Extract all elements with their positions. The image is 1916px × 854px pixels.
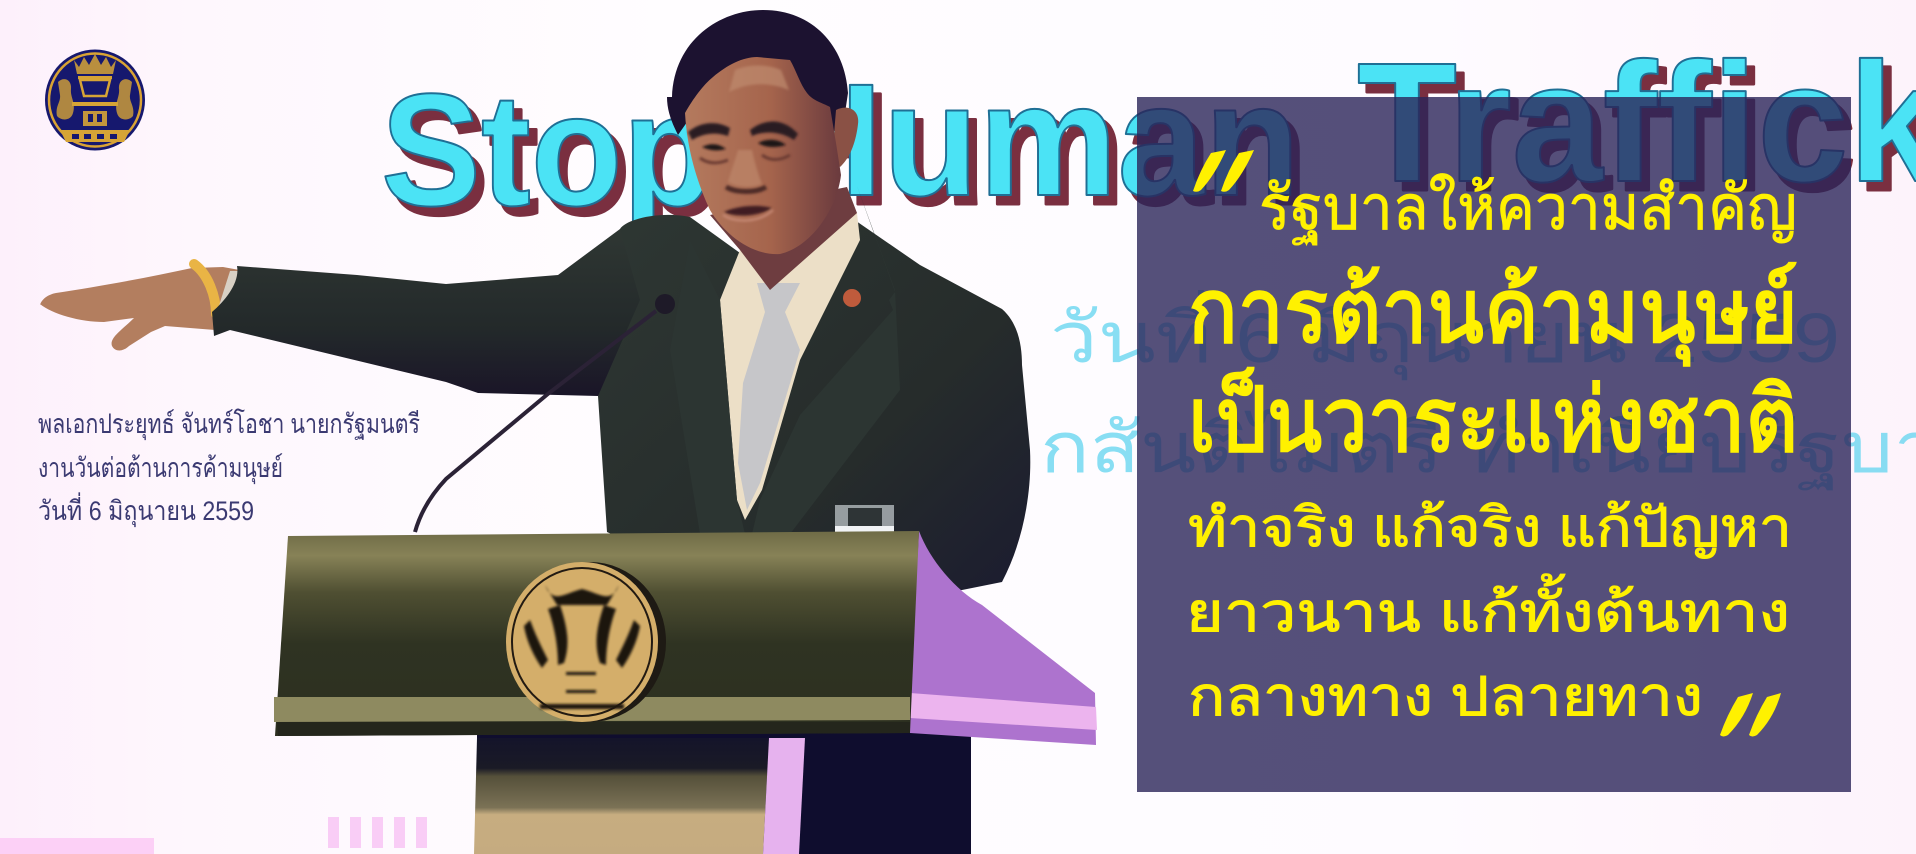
yellow wristband	[194, 264, 216, 314]
face	[685, 57, 841, 254]
screen heading: Stop Human Trafficking	[381, 28, 1916, 248]
quote text	[1186, 173, 1798, 727]
hair	[667, 10, 848, 135]
hand	[40, 267, 248, 350]
shirt and collar	[720, 213, 860, 520]
screen heading: Stop Human Trafficking: Stop	[389, 69, 722, 248]
opening quotation mark	[1193, 150, 1254, 192]
quote line 3: เป็นวาระแห่งชาติ	[1188, 366, 1798, 471]
lectern shadow under band	[277, 722, 910, 736]
lectern stem pink edge	[763, 738, 805, 854]
screen heading: Stop Human Trafficking: Stop	[381, 60, 714, 239]
caption: speaker and event	[38, 408, 420, 528]
screen heading: Stop Human Trafficking: Human	[770, 50, 1300, 229]
legs behind lectern	[477, 730, 971, 854]
quote line 5: ยาวนาน แก้ทั้งต้นทาง	[1186, 574, 1790, 643]
screen subtitle: date and venue: กสันติไมตรี ทำเนียบรัฐบาล	[1040, 409, 1916, 490]
suit body	[598, 203, 1030, 622]
quote line 2: การต้านค้ามนุษย์	[1188, 262, 1798, 366]
ear	[832, 108, 858, 167]
caption line: date: วันที่ 6 มิถุนายน 2559	[38, 492, 254, 528]
caption line: event: งานวันต่อต้านการค้ามนุษย์	[38, 452, 283, 485]
closing quotation mark	[1720, 693, 1781, 736]
face features	[688, 66, 798, 220]
lectern side	[910, 531, 1096, 745]
screen subtitle: date and venue: วันที่ 6 มิถุนายน 2559	[1050, 290, 1840, 381]
microphone	[415, 294, 675, 532]
quote panel	[1137, 97, 1851, 792]
lectern stem	[474, 738, 769, 854]
quote line 6: กลางทาง ปลายทาง	[1188, 667, 1703, 727]
suit sleeve	[212, 229, 640, 396]
screen heading: Stop Human Trafficking: Human	[778, 59, 1308, 238]
lectern gold seal	[506, 562, 666, 722]
government seal logo	[45, 50, 145, 150]
quote line 1: รัฐบาลให้ความสำคัญ	[1259, 173, 1797, 245]
head	[667, 10, 858, 254]
screen subtitle: date and venue	[1040, 290, 1916, 490]
water glass	[835, 505, 894, 533]
shirt cuff	[216, 271, 249, 329]
lectern	[274, 531, 1097, 854]
suit lapels	[670, 186, 900, 534]
neck	[710, 187, 857, 290]
lectern side highlight	[910, 693, 1097, 730]
lectern gold band	[274, 697, 910, 722]
caption line: speaker name: พลเอกประยุทธ์ จันทร์โอชา นายกรัฐมนตรี	[38, 408, 420, 441]
quote line 4: ทำจริง แก้จริง แก้ปัญหา	[1188, 498, 1792, 558]
lapel pin	[843, 289, 861, 307]
photo: speaker at lectern	[40, 10, 1097, 854]
panel background	[1137, 97, 1851, 792]
necktie	[738, 283, 800, 510]
lectern front	[275, 531, 919, 736]
screen decoration: pink bars	[328, 817, 427, 848]
